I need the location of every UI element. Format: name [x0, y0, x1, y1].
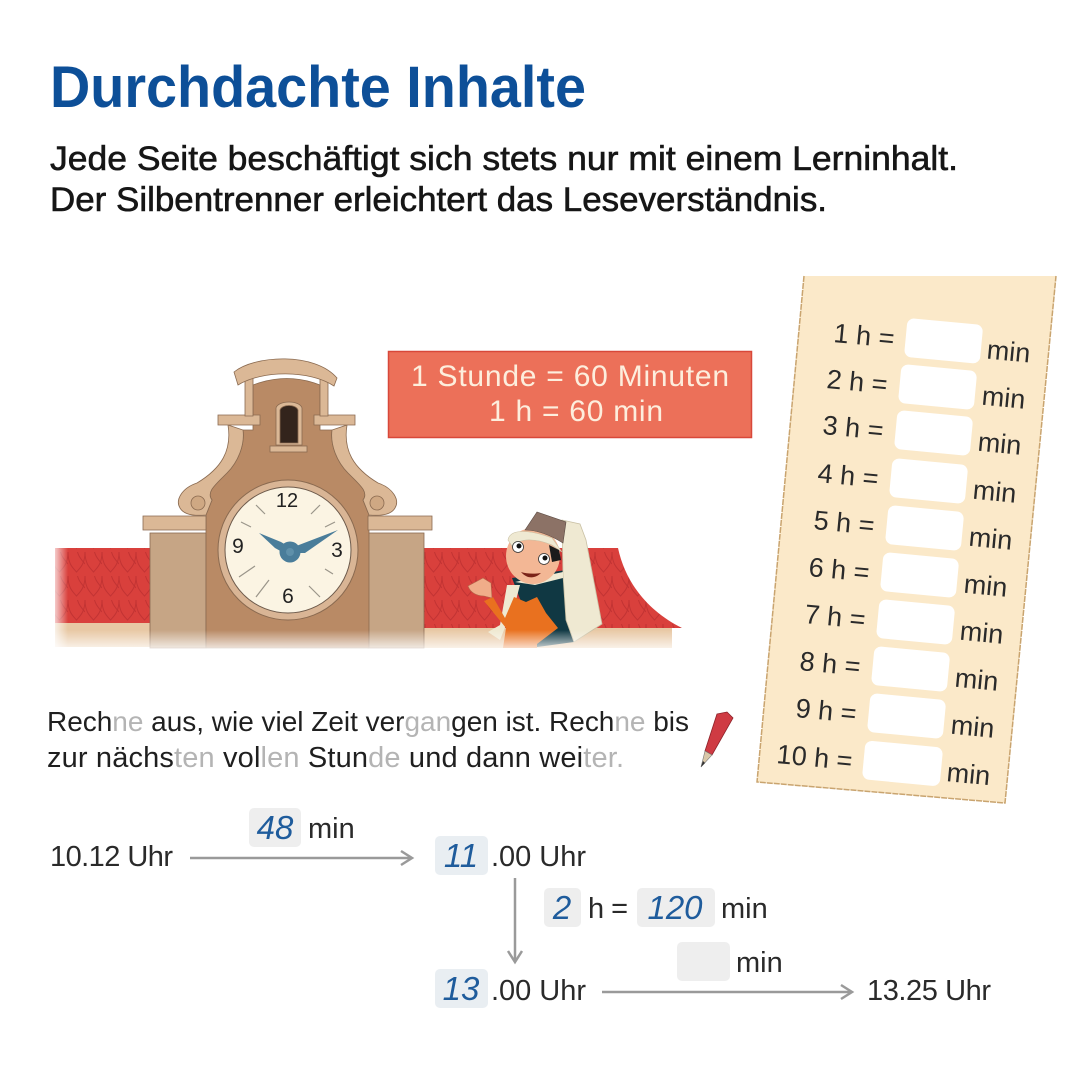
- answer box 13.00 Uhr: .00 Uhr: [491, 975, 586, 1007]
- arrow down to 13.00: [508, 878, 522, 962]
- row 8 h: [798, 639, 1001, 697]
- hat: [525, 512, 566, 543]
- curly hair: [508, 532, 562, 552]
- paper strip: [757, 276, 1056, 803]
- row 3 h: [821, 403, 1024, 461]
- subtitle text: Der Silbentrenner erleichtert das Leseverständnis.: [50, 181, 827, 219]
- callout: 1 hour equals 60 minutes: [388, 352, 752, 438]
- bottom fade of illustration: [50, 630, 690, 654]
- clock face: [218, 480, 358, 620]
- hand: [468, 578, 492, 598]
- clock face: 6: [282, 585, 294, 608]
- answer box 48 min: 48: [257, 809, 294, 846]
- veil: [562, 520, 602, 642]
- clock face: 3: [331, 539, 343, 562]
- row 7 h: [803, 592, 1006, 650]
- row 10 h: [775, 732, 992, 791]
- answer boxes 2 h = 120 min: [544, 888, 768, 927]
- callout: 1 hour equals 60 minutes: 1 h = 60 min: [489, 395, 663, 428]
- callout: 1 hour equals 60 minutes: 1 Stunde = 60 Minuten: [411, 360, 729, 393]
- row 6 h: min: [963, 569, 1009, 603]
- left roof: [55, 548, 151, 647]
- instruction text: Rechne aus, wie viel Zeit vergangen ist. Rechne bis: [47, 706, 689, 737]
- row 4 h: 4 h =: [816, 458, 880, 494]
- arrow to 13.25: [602, 985, 852, 999]
- empty answer box min: min: [736, 947, 783, 979]
- row 7 h: 7 h =: [803, 599, 867, 635]
- row 5 h: min: [968, 522, 1014, 556]
- arrow to 11.00: [190, 851, 412, 865]
- row 9 h: [794, 686, 997, 744]
- row 8 h: min: [954, 663, 1000, 697]
- row 5 h: 5 h =: [812, 505, 876, 541]
- row 4 h: min: [972, 475, 1018, 509]
- row 9 h: min: [950, 710, 996, 744]
- row 1 h: min: [986, 335, 1032, 369]
- row 2 h: 2 h =: [825, 364, 889, 400]
- answer box 48 min: min: [308, 813, 355, 845]
- left fade of illustration: [50, 545, 68, 651]
- end time 13.25: 13.25 Uhr: [867, 975, 991, 1007]
- row 2 h: [825, 357, 1028, 415]
- title: Durchdachte Inhalte: [50, 55, 586, 120]
- answer box 13.00 Uhr: [435, 969, 586, 1008]
- row 1 h: [832, 311, 1033, 369]
- illustration: town hall roof and clock tower: [55, 359, 682, 648]
- clock face: 12: [276, 490, 298, 512]
- answer box 11.00 Uhr: .00 Uhr: [491, 841, 586, 873]
- subtitle text: Jede Seite beschäftigt sich stets nur mit einem Lerninhalt.: [50, 140, 958, 178]
- clock hands: [259, 530, 338, 562]
- instruction text: [47, 706, 689, 774]
- answer boxes 2 h = 120 min: h =: [588, 893, 628, 925]
- eyes and mouth: [512, 542, 561, 577]
- row 9 h: 9 h =: [794, 693, 858, 729]
- row 5 h: [812, 498, 1015, 556]
- row 7 h: min: [959, 616, 1005, 650]
- strip edges: [757, 276, 1056, 803]
- row 3 h: 3 h =: [821, 410, 885, 446]
- answer box 11.00 Uhr: [435, 836, 586, 875]
- answer box 11.00 Uhr: 11: [444, 837, 478, 874]
- instruction text: zur nächsten vollen Stunde und dann weiter.: [47, 742, 624, 774]
- answer boxes 2 h = 120 min: 2: [552, 889, 571, 926]
- clock face: 9: [232, 535, 244, 558]
- clock tower building: [143, 359, 432, 648]
- row 6 h: 6 h =: [807, 552, 871, 588]
- hair: [512, 570, 574, 648]
- answer box 48 min: [249, 808, 355, 847]
- illustration: girl with hat: [468, 512, 602, 648]
- row 4 h: [816, 451, 1019, 509]
- empty answer box min: [677, 942, 783, 981]
- answer boxes 2 h = 120 min: 120: [647, 889, 703, 926]
- task diagram: [50, 808, 991, 1008]
- row 8 h: 8 h =: [798, 646, 862, 682]
- start time 10.12: 10.12 Uhr: [50, 841, 173, 873]
- row 3 h: min: [977, 427, 1023, 461]
- row 1 h: 1 h =: [832, 318, 896, 354]
- row 2 h: min: [981, 381, 1027, 415]
- panel: conversion strip: [757, 276, 1056, 803]
- right roof: [424, 548, 682, 648]
- subtitle text: [50, 140, 958, 219]
- answer boxes 2 h = 120 min: min: [721, 893, 768, 925]
- row 10 h: 10 h =: [775, 739, 854, 776]
- row 6 h: [807, 545, 1010, 603]
- orange dress: [484, 597, 558, 648]
- icon: red pencil: [701, 712, 733, 767]
- row 10 h: min: [945, 757, 992, 791]
- face: [506, 528, 560, 584]
- answer box 13.00 Uhr: 13: [443, 970, 480, 1007]
